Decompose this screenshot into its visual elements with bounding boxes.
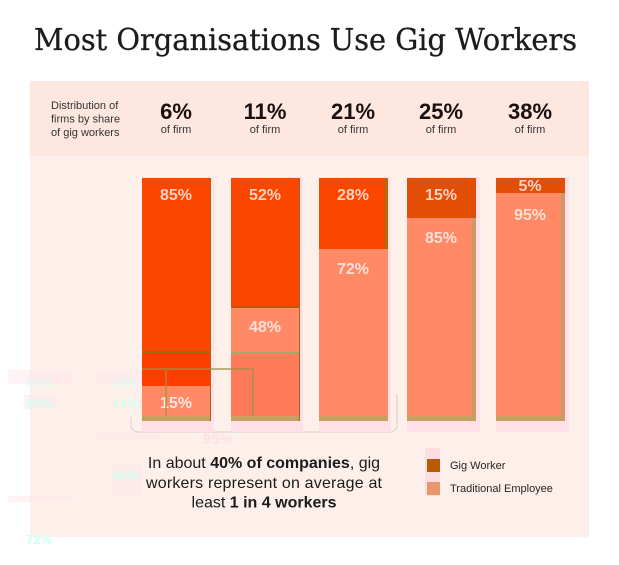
legend label: traditional employee: Traditional Employee xyxy=(450,483,553,495)
label: 15%: 15% xyxy=(425,187,457,204)
connector artifact lines xyxy=(142,369,254,416)
label: 28%: 28% xyxy=(337,187,369,204)
column heading: 38% xyxy=(508,99,552,136)
column heading: 21%: of firm xyxy=(338,124,368,136)
panel: chart background xyxy=(30,156,589,537)
column heading: 21%: 21% xyxy=(331,99,375,124)
column heading: 6%: 6% xyxy=(160,99,192,124)
callout text: In about 40% of companies, gig xyxy=(148,455,380,472)
label: 15%: 15% xyxy=(160,395,192,412)
bar: 25% of firms xyxy=(407,177,480,432)
column heading: 38%: of firm xyxy=(515,124,545,136)
column heading: 6% xyxy=(160,99,192,136)
callout text: workers represent on average at xyxy=(145,475,383,492)
column heading: 25%: of firm xyxy=(426,124,456,136)
column heading: 25% xyxy=(419,99,463,136)
legend label: gig worker: Gig Worker xyxy=(450,460,506,472)
bar: 6% of firms xyxy=(142,177,214,432)
label: 85%: 85% xyxy=(160,187,192,204)
bar: 11% of firms xyxy=(231,177,303,432)
label: 95%: 95% xyxy=(514,207,546,224)
label: 5%: 5% xyxy=(518,178,542,195)
ghost labels: 15% xyxy=(113,396,139,411)
ghost labels: 15% xyxy=(113,375,139,390)
ghost labels: 80% xyxy=(26,375,52,390)
callout text: least 1 in 4 workers xyxy=(192,494,336,512)
label: 72%: 72% xyxy=(337,261,369,278)
bar: 21% of firms xyxy=(319,177,391,432)
ghost artifact blocks xyxy=(8,370,160,502)
column heading: 25%: 25% xyxy=(419,99,463,124)
row label: of gig workers xyxy=(51,127,120,139)
legend swatch: traditional employee xyxy=(427,482,440,495)
column heading: 6%: of firm xyxy=(161,124,191,136)
label: 52%: 52% xyxy=(249,187,281,204)
row label: Distribution of xyxy=(51,100,119,112)
row label: firms by share xyxy=(51,114,120,126)
column heading: 21% xyxy=(331,99,375,136)
ghost labels: 95% xyxy=(203,431,233,448)
ghost labels: 85% xyxy=(113,468,139,483)
legend xyxy=(425,448,553,496)
bracket callout outline xyxy=(131,394,397,432)
ghost labels: 72% xyxy=(26,532,52,547)
title: Most Organisations Use Gig Workers xyxy=(34,23,577,58)
legend swatch: gig worker xyxy=(427,459,440,472)
column heading: 38%: 38% xyxy=(508,99,552,124)
ghost labels: 20% xyxy=(26,396,52,411)
column heading: 11% xyxy=(244,99,286,136)
label: 85%: 85% xyxy=(425,230,457,247)
column heading: 11%: of firm xyxy=(250,124,280,136)
column heading: 11%: 11% xyxy=(244,99,286,124)
panel: header band xyxy=(30,81,589,156)
ghost labels xyxy=(26,375,233,547)
bar: 38% of firms xyxy=(496,177,569,432)
label: 48%: 48% xyxy=(249,319,281,336)
